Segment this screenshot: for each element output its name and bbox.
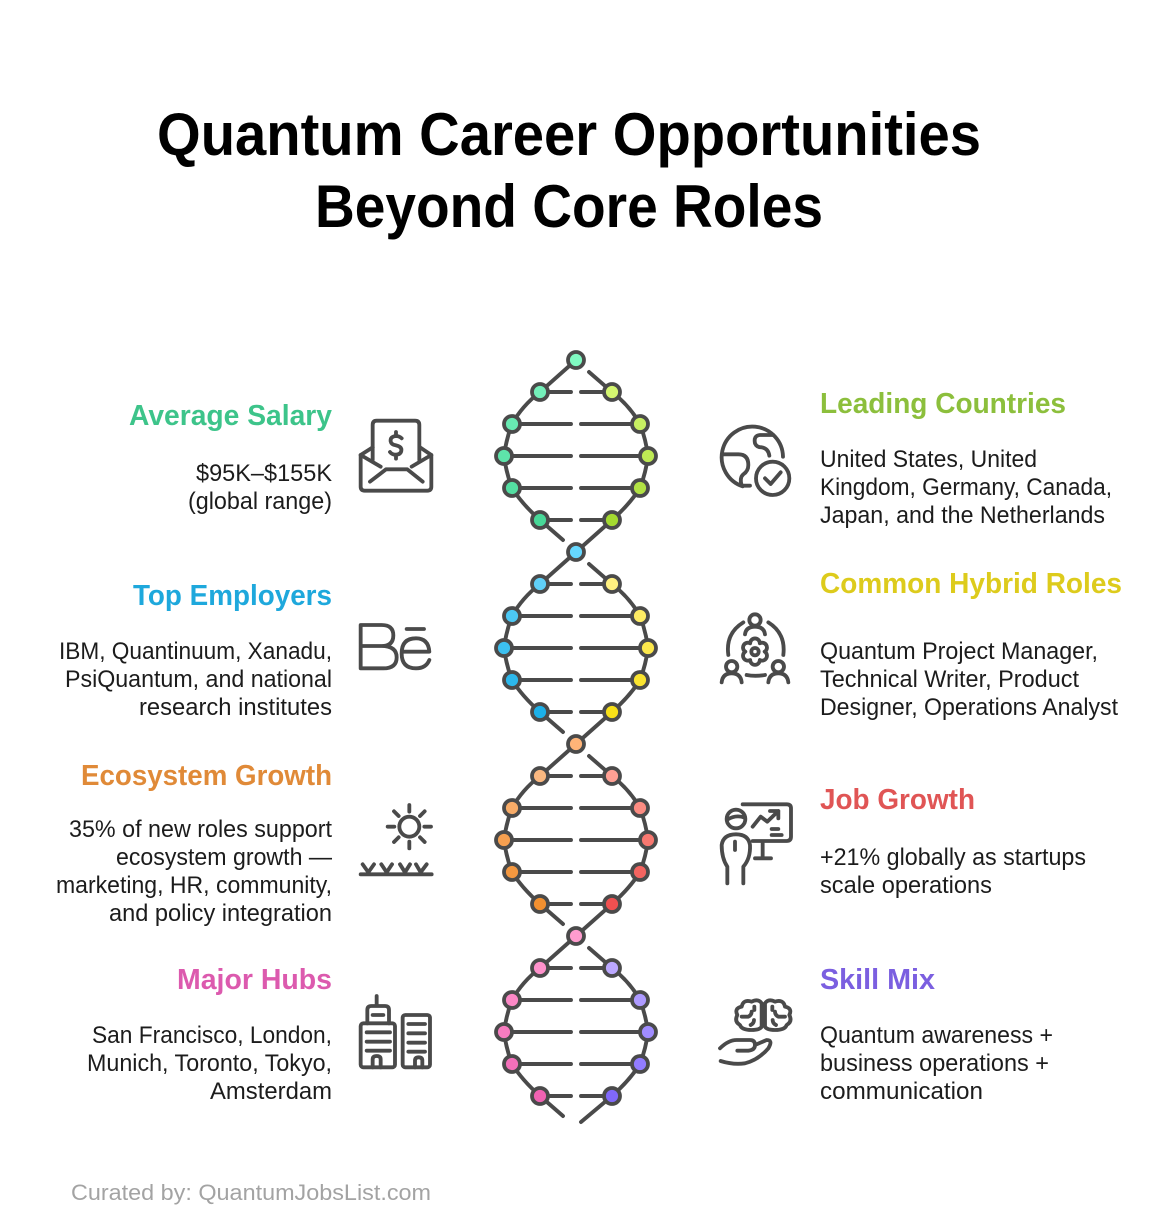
panel: leading countries: Leading Countries xyxy=(820,388,1066,420)
footer credit: Curated by: QuantumJobsList.com xyxy=(71,1180,431,1205)
panel: major hubs: Major Hubs xyxy=(177,964,332,996)
panel: ecosystem growth: marketing, HR, community, xyxy=(56,872,332,899)
panel: skill mix: Skill Mix xyxy=(820,964,935,996)
icon: team around gear xyxy=(722,614,788,682)
icon: sun over grass xyxy=(361,805,432,874)
panel: job growth: +21% globally as startups xyxy=(820,844,1086,871)
icon: presenter at chart board xyxy=(722,804,791,883)
helix strands xyxy=(504,360,648,1122)
panel: job growth: Job Growth xyxy=(820,784,975,816)
panel: ecosystem growth: 35% of new roles support xyxy=(69,816,332,843)
panel: leading countries xyxy=(820,388,1112,529)
icon: Behance logo xyxy=(361,625,429,668)
panel: job growth: scale operations xyxy=(820,872,992,899)
icon: envelope with dollar xyxy=(361,421,431,491)
panel: top employers xyxy=(59,580,332,721)
panel: leading countries: Kingdom, Germany, Canada, xyxy=(820,474,1112,501)
panel: ecosystem growth: and policy integration xyxy=(109,900,332,927)
icon: brain over hand xyxy=(720,1000,791,1064)
title: Quantum Career Opportunities xyxy=(157,101,981,168)
panel: skill mix: Quantum awareness + xyxy=(820,1022,1053,1049)
panel: average salary xyxy=(129,400,332,515)
panel: common hybrid roles: Technical Writer, Product xyxy=(820,666,1079,693)
panel: skill mix: communication xyxy=(820,1078,983,1105)
icon: globe with check xyxy=(722,427,789,495)
panel: ecosystem growth xyxy=(56,760,332,927)
panel: common hybrid roles: Common Hybrid Roles xyxy=(820,568,1122,600)
panel: major hubs: San Francisco, London, xyxy=(92,1022,332,1049)
panel: job growth xyxy=(820,784,1086,899)
panel: common hybrid roles: Designer, Operations Analyst xyxy=(820,694,1118,721)
panel: average salary: $95K–$155K xyxy=(196,460,332,487)
panel: average salary: (global range) xyxy=(188,488,332,515)
panel: skill mix: business operations + xyxy=(820,1050,1049,1077)
panel: major hubs: Amsterdam xyxy=(210,1078,332,1105)
panel: ecosystem growth: ecosystem growth — xyxy=(116,844,332,871)
panel: common hybrid roles xyxy=(820,568,1122,721)
panel: average salary: Average Salary xyxy=(129,400,332,432)
panel: leading countries: United States, United xyxy=(820,446,1037,473)
title xyxy=(157,101,981,240)
panel: leading countries: Japan, and the Netherlands xyxy=(820,502,1105,529)
panel: top employers: PsiQuantum, and national xyxy=(65,666,332,693)
panel: top employers: Top Employers xyxy=(133,580,332,612)
panel: top employers: research institutes xyxy=(139,694,332,721)
DNA helix xyxy=(496,352,656,1122)
panel: major hubs xyxy=(87,964,332,1105)
title: Beyond Core Roles xyxy=(315,173,823,240)
panel: skill mix xyxy=(820,964,1053,1105)
icon: office buildings xyxy=(361,996,430,1067)
panel: top employers: IBM, Quantinuum, Xanadu, xyxy=(59,638,332,665)
panel: major hubs: Munich, Toronto, Tokyo, xyxy=(87,1050,332,1077)
panel: common hybrid roles: Quantum Project Manager, xyxy=(820,638,1098,665)
helix nodes xyxy=(496,352,656,1104)
panel: ecosystem growth: Ecosystem Growth xyxy=(81,760,332,792)
